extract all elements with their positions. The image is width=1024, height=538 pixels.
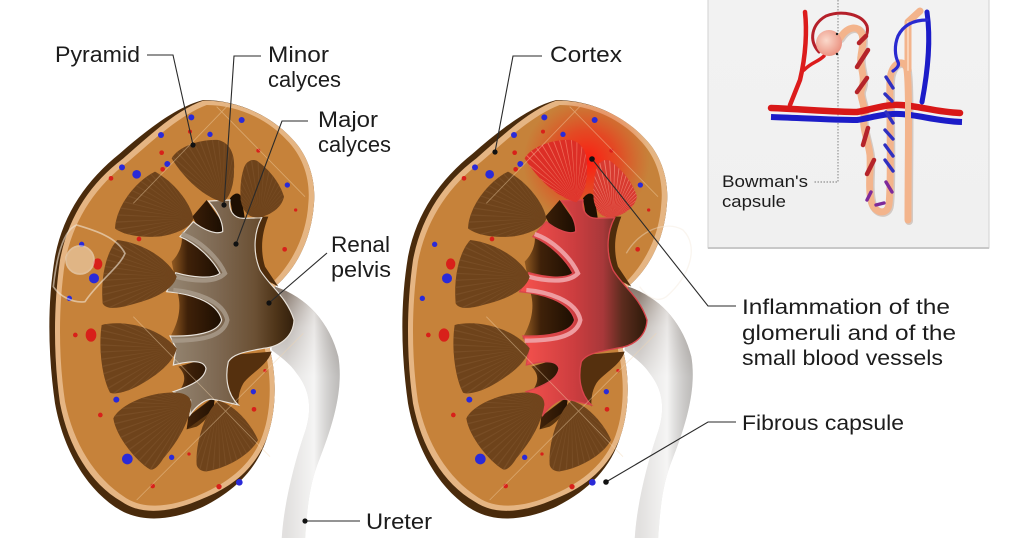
- inflamed renal pelvis: [520, 194, 647, 429]
- inflamed pyramid two: [593, 160, 637, 218]
- capillary wraps purple: [867, 182, 892, 205]
- label: Renal pelvis: pelvis: [331, 257, 391, 282]
- label: Major calyces: Major: [318, 107, 378, 132]
- tubule re-crossing: [905, 100, 911, 124]
- label: Inflammation: [589, 156, 956, 370]
- lower pyramids right: [453, 172, 615, 471]
- renal tubule: [840, 11, 920, 221]
- label: Bowman's capsule: [722, 172, 808, 211]
- label: Renal pelvis: Renal: [331, 232, 390, 257]
- ureter left: [272, 287, 340, 538]
- venule: [893, 12, 929, 102]
- afferent artery: [790, 12, 867, 105]
- watermark lines: [133, 107, 305, 500]
- watermark lines right: [486, 107, 658, 500]
- watermark stamp right: [626, 226, 691, 299]
- inflamed pyramid one: [524, 140, 588, 202]
- label: Inflammation: glomeruli and of the: [742, 321, 956, 345]
- inflammation glow: [529, 102, 644, 218]
- label: Ureter: Ureter: [366, 509, 432, 534]
- label: Inflammation: small blood vessels: [742, 346, 943, 370]
- capillary wraps blue: [885, 77, 893, 171]
- lower pyramids left: [100, 172, 262, 471]
- label: Ureter: [302, 509, 432, 534]
- dotted leader: Bowman's capsule: [813, 0, 838, 182]
- glomerulus capsule: [816, 30, 842, 56]
- label: Pyramid: Pyramid: [55, 42, 140, 67]
- label: Inflammation: Inflammation of the: [742, 295, 950, 319]
- label: Minor calyces: calyces: [268, 67, 341, 92]
- label: Pyramid: [55, 42, 196, 148]
- label: Major calyces: [233, 107, 391, 247]
- panel: healthy kidney: [49, 100, 340, 538]
- renal pelvis left: [167, 194, 294, 429]
- ureter right: [625, 287, 693, 538]
- pyramid top right: [240, 160, 284, 218]
- label: Cortex: [492, 42, 622, 155]
- label: Minor calyces: [221, 42, 341, 208]
- label: Fibrous capsule: Fibrous capsule: [742, 411, 904, 435]
- label: Renal pelvis: [266, 232, 391, 306]
- label: Minor calyces: Minor: [268, 42, 329, 67]
- kidney body right: [402, 100, 667, 518]
- pyramid top left: [172, 140, 234, 202]
- kidney body left: [49, 100, 314, 518]
- label: Major calyces: calyces: [318, 132, 391, 157]
- panel: inflamed kidney: [402, 98, 693, 538]
- watermark stamp: [53, 225, 125, 302]
- blood vessels right: [420, 114, 650, 489]
- blue horizontal vessel: [771, 114, 962, 122]
- blood vessels left: [67, 114, 297, 489]
- red horizontal vessel: [771, 105, 960, 113]
- label: Bowman's capsule: Bowman's: [722, 172, 808, 191]
- capsule marker dots: [836, 33, 838, 55]
- inset panel: nephron: [708, 0, 989, 249]
- label: Fibrous capsule: [603, 411, 904, 485]
- label: Bowman's capsule: capsule: [722, 192, 786, 211]
- capillary wraps red: [857, 36, 874, 174]
- label: Cortex: Cortex: [550, 42, 622, 67]
